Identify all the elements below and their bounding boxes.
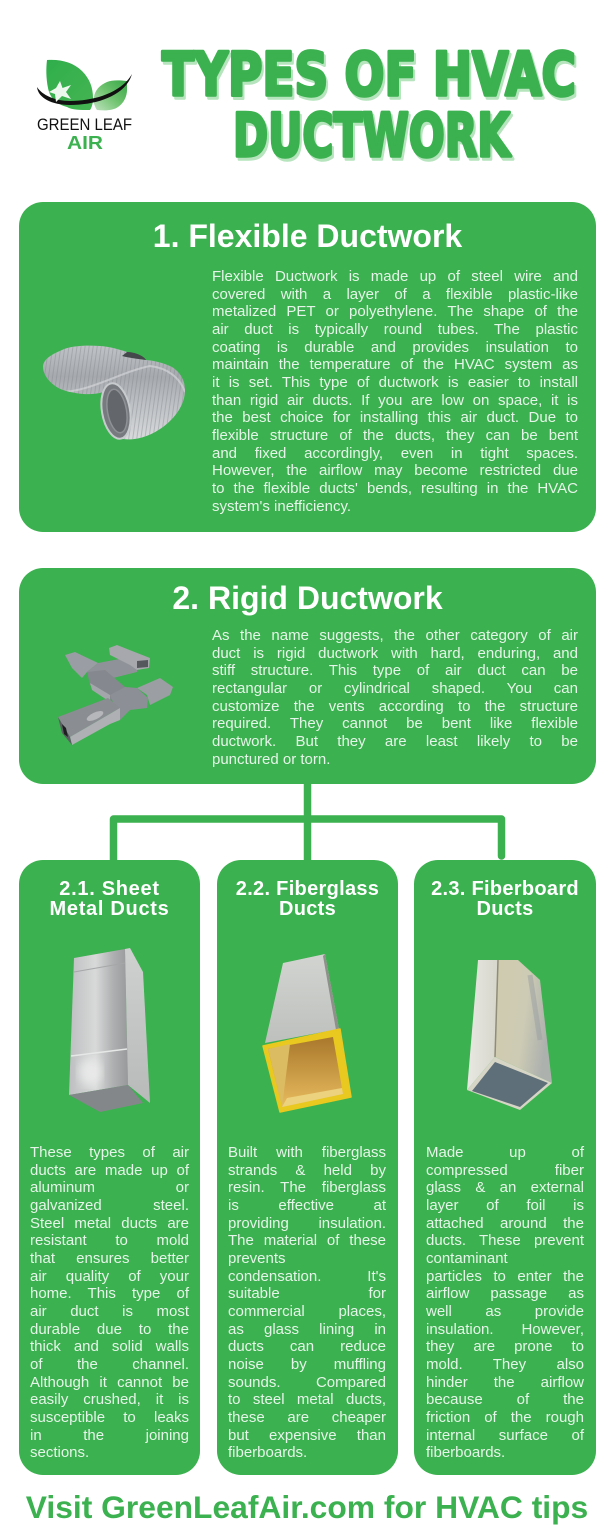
text: fiberboard ducts description: particles to enter the (426, 1268, 584, 1285)
heading: sheet metal ducts: Metal Ducts (50, 898, 169, 920)
text: sheet metal ducts description (30, 1144, 190, 1461)
panel: fiberglass ducts (217, 860, 398, 1475)
heading: sheet metal ducts: 2.1. Sheet (59, 878, 160, 900)
text: flexible ductwork description: flexible structure of the ducts, they can be bent (212, 427, 578, 444)
text: fiberglass ducts description: but expensive than (228, 1427, 386, 1444)
text: fiberboard ducts description: contaminant (426, 1250, 508, 1267)
text: rigid ductwork description: As the name suggests, the other category of air (212, 627, 578, 644)
text: fiberboard ducts description: mold. They also (426, 1356, 584, 1373)
text: fiberglass ducts description: fiberboards. (228, 1444, 307, 1461)
text: fiberglass ducts description: to steel metal ducts, (228, 1391, 386, 1408)
text: fiberboard ducts description: hinder the airflow (426, 1374, 584, 1391)
text: sheet metal ducts description: sections. (30, 1444, 89, 1461)
text: fiberglass ducts description: commercial places, (228, 1303, 386, 1320)
text: fiberglass ducts description: resin. The fiberglass (228, 1179, 386, 1196)
title (160, 40, 578, 174)
panel: sheet metal ducts (19, 860, 200, 1475)
text: fiberglass ducts description: condensation. It's (228, 1268, 386, 1285)
text: fiberglass ducts description: sounds. Compared (228, 1374, 386, 1391)
text: sheet metal ducts description: Steel metal ducts are (30, 1215, 189, 1232)
text: sheet metal ducts description: air quality of your (30, 1268, 189, 1285)
text: flexible ductwork description: and fixed accordingly, even in tight spaces. (212, 445, 578, 462)
text: rigid ductwork description: duct is rigid ductwork with hard, enduring, and (212, 645, 578, 662)
text: flexible ductwork description: However, the airflow may become restricted due (212, 462, 578, 479)
heading: fiberboard ducts (431, 878, 579, 920)
heading: flexible ductwork: 1. Flexible Ductwork (153, 218, 462, 254)
text: fiberglass ducts description: suitable for (228, 1285, 386, 1302)
text: flexible ductwork description: coating is durable and provides insulation to (212, 339, 578, 356)
text: flexible ductwork description: it is set. This type of ductwork is easier to install (212, 374, 578, 391)
text: sheet metal ducts description: susceptible to leaks (30, 1409, 189, 1426)
icon: fiberglass duct (262, 954, 352, 1113)
text: fiberboard ducts description: ducts. These prevent (426, 1232, 584, 1249)
text: sheet metal ducts description: ducts are made up of (30, 1162, 189, 1179)
heading: sheet metal ducts (50, 878, 169, 920)
text: flexible ductwork description: air duct is typically round tubes. The plastic (212, 321, 578, 338)
text: sheet metal ducts description: that ensures better (30, 1250, 189, 1267)
text: fiberglass ducts description: noise by muffling (228, 1356, 386, 1373)
text: flexible ductwork description: system's inefficiency. (212, 498, 351, 515)
text: fiberglass ducts description: Built with fiberglass (228, 1144, 386, 1161)
text: fiberboard ducts description: they are prone to (426, 1338, 584, 1355)
text: rigid ductwork description: ductwork. But they are least likely to be (212, 733, 578, 750)
text: sheet metal ducts description: Although it cannot be (30, 1374, 189, 1391)
text: fiberboard ducts description: attached around the (426, 1215, 584, 1232)
heading: rigid ductwork: 2. Rigid Ductwork (172, 580, 443, 616)
text: fiberglass ducts description: these are cheaper (228, 1409, 386, 1426)
text: flexible ductwork description: metalized PET or polyethylene. The shape of the (212, 303, 578, 320)
text: sheet metal ducts description: thick and solid walls (30, 1338, 189, 1355)
text: rigid ductwork description: stiff structure. This type of air duct can be (212, 662, 578, 679)
heading: fiberboard ducts: Ducts (476, 898, 534, 920)
heading: fiberglass ducts (236, 878, 379, 920)
icon: flexible duct (43, 346, 185, 440)
text: sheet metal ducts description: These types of air (30, 1144, 189, 1161)
text: fiberglass ducts description: providing insulation. (228, 1215, 386, 1232)
text: sheet metal ducts description: in the joining (30, 1427, 189, 1444)
text: fiberglass ducts description: strands & held by (228, 1162, 386, 1179)
text: flexible ductwork description: to the flexible ducts' bends, resulting in the HVAC (212, 480, 578, 497)
text: fiberboard ducts description: airflow passage as (426, 1285, 584, 1302)
text: fiberboard ducts description: friction of the rough (426, 1409, 584, 1426)
text: sheet metal ducts description: resistant to mold (30, 1232, 189, 1249)
heading: fiberglass ducts: 2.2. Fiberglass (236, 878, 379, 900)
text: sheet metal ducts description: galvanized steel. (30, 1197, 189, 1214)
logo: Green Leaf Air: GREEN LEAF (37, 116, 132, 134)
text: rigid ductwork description: rectangular or cylindrical shaped. You can (212, 680, 578, 697)
text: rigid ductwork description (212, 627, 578, 768)
text: fiberglass ducts description (228, 1144, 386, 1461)
text: flexible ductwork description: than rigid air ducts. If you are low on space, it is (212, 392, 578, 409)
text: flexible ductwork description: covered with a layer of a flexible plastic-like (212, 286, 578, 303)
text: sheet metal ducts description: home. This type of (30, 1285, 189, 1302)
text: fiberboard ducts description: because of the (426, 1391, 584, 1408)
panel: flexible ductwork (19, 202, 596, 532)
heading: fiberglass ducts: Ducts (279, 898, 336, 920)
logo: Green Leaf Air (37, 60, 132, 153)
text: flexible ductwork description: Flexible Ductwork is made up of steel wire and (212, 268, 578, 285)
text: fiberboard ducts description: internal surface of (426, 1427, 584, 1444)
text: fiberboard ducts description: layer of foil is (426, 1197, 584, 1214)
panel: fiberboard ducts (414, 860, 596, 1475)
panel: rigid ductwork (19, 568, 596, 784)
text: flexible ductwork description: maintain the temperature of the HVAC system as (212, 356, 578, 373)
text: rigid ductwork description: punctured or torn. (212, 751, 330, 768)
text: fiberglass ducts description: prevents (228, 1250, 286, 1267)
text: sheet metal ducts description: air duct is most (30, 1303, 189, 1320)
text: fiberglass ducts description: is effective at (228, 1197, 386, 1214)
text: sheet metal ducts description: durable due to the (30, 1321, 189, 1338)
text: rigid ductwork description: customize the vents according to the structure (212, 698, 578, 715)
text: sheet metal ducts description: aluminum or (30, 1179, 189, 1196)
text: fiberboard ducts description: well as provide (426, 1303, 584, 1320)
heading: fiberboard ducts: 2.3. Fiberboard (431, 878, 579, 900)
icon: fiberboard duct (467, 960, 552, 1110)
icon: rigid duct assembly (58, 645, 173, 745)
logo: Green Leaf Air: AIR (67, 132, 103, 153)
text: flexible ductwork description (212, 268, 578, 515)
icon: sheet metal duct (69, 948, 150, 1112)
text: fiberglass ducts description: as glass lining in (228, 1321, 386, 1338)
text: fiberglass ducts description: The material of these (228, 1232, 386, 1249)
text: fiberboard ducts description: Made up of (426, 1144, 584, 1161)
text: flexible ductwork description: the best choice for installing this air duct. Due to (212, 409, 578, 426)
text: rigid ductwork description: required. They cannot be bent like flexible (212, 715, 578, 732)
text: fiberglass ducts description: ducts can reduce (228, 1338, 386, 1355)
text: fiberboard ducts description: insulation. However, (426, 1321, 584, 1338)
text: sheet metal ducts description: easily crushed, it is (30, 1391, 189, 1408)
text: fiberboard ducts description: fiberboards. (426, 1444, 505, 1461)
text: sheet metal ducts description: of the channel. (30, 1356, 189, 1373)
text: fiberboard ducts description: glass & an external (426, 1179, 584, 1196)
footer call to action: Visit GreenLeafAir.com for HVAC tips (26, 1489, 588, 1525)
text: fiberboard ducts description: compressed fiber (426, 1162, 584, 1179)
text: fiberboard ducts description (426, 1144, 584, 1461)
